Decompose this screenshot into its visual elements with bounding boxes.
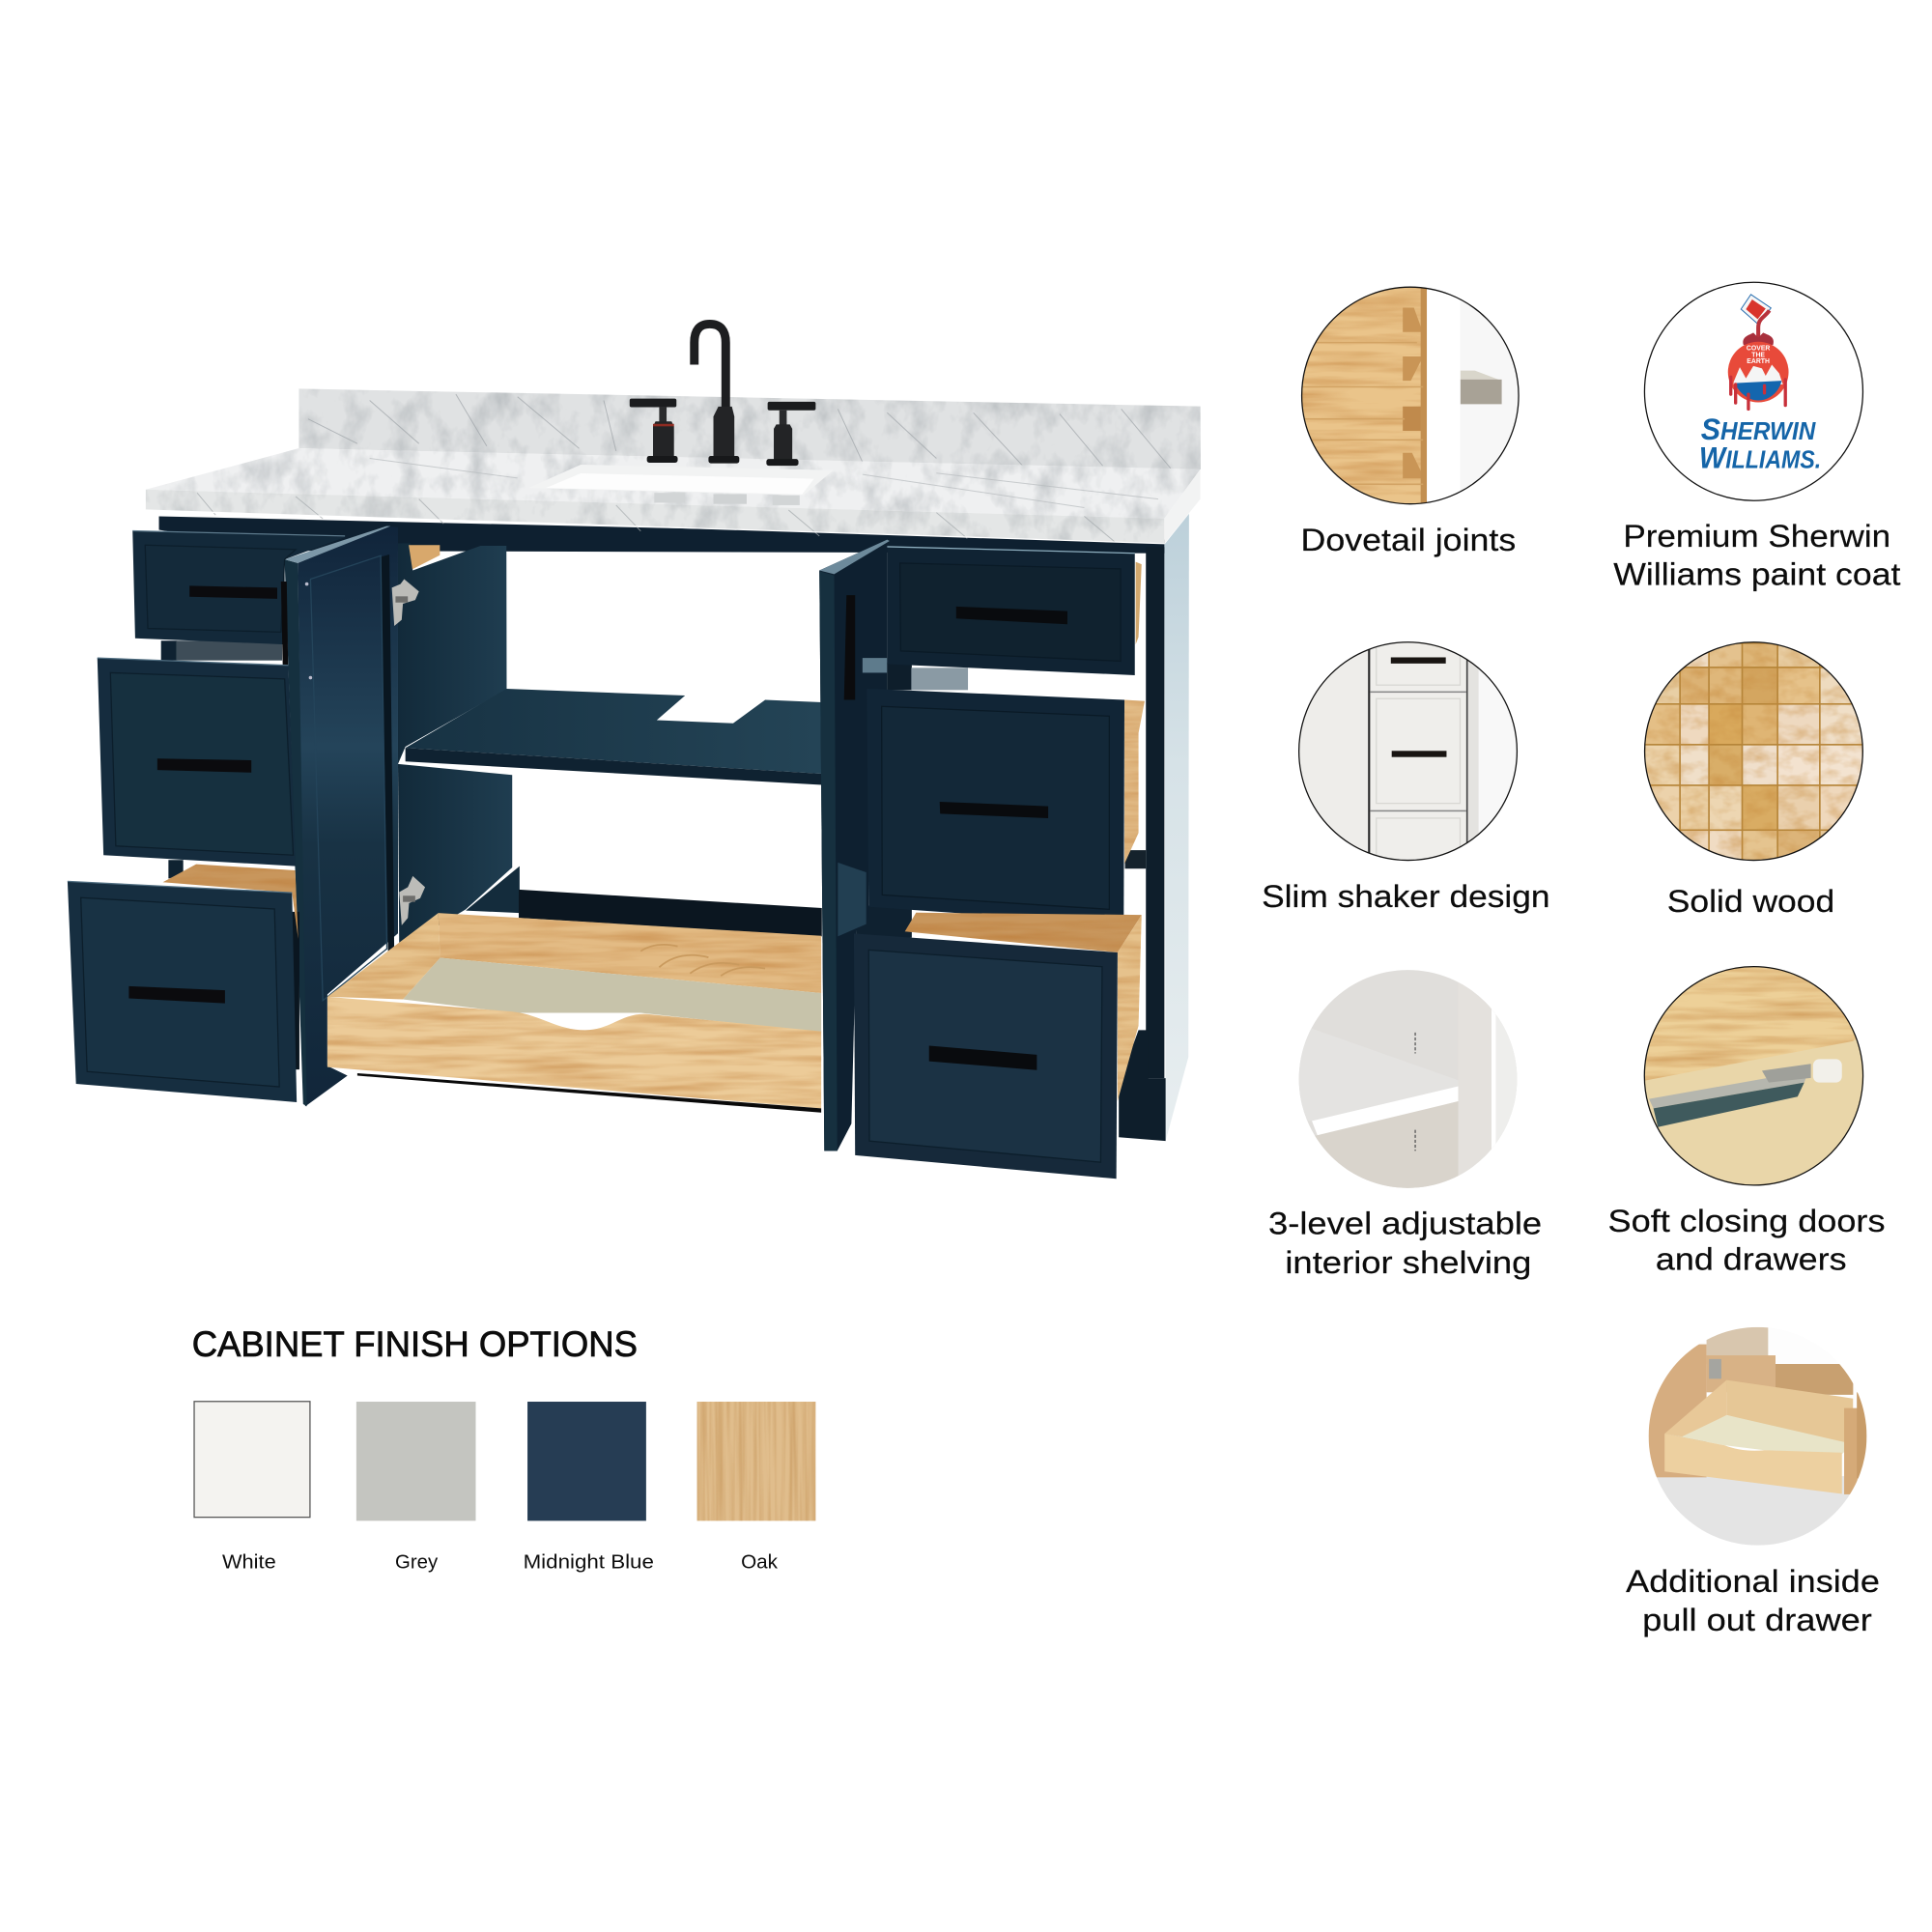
left interior panel upper <box>398 543 506 764</box>
left door <box>285 526 398 1106</box>
label: Premium Sherwin <box>1623 519 1890 554</box>
bottom left drawer interior <box>163 865 298 939</box>
label <box>1613 519 1900 591</box>
icon: sherwin williams logo <box>1644 282 1862 500</box>
lower back rail <box>466 867 822 936</box>
globe: COVER <box>1747 346 1770 353</box>
label: 3-level adjustable <box>1268 1206 1542 1240</box>
vanity product image <box>68 324 1201 1179</box>
right end panel <box>1164 514 1189 1141</box>
bottom right drawer <box>854 913 1142 1179</box>
left interior panel lower <box>398 764 512 949</box>
label <box>1608 1204 1886 1277</box>
swatch: white <box>194 1402 310 1573</box>
label: Additional inside <box>1626 1564 1880 1599</box>
hinge lower <box>399 876 425 925</box>
icon: solid wood blocks photo <box>1644 642 1863 862</box>
label: interior shelving <box>1285 1245 1531 1280</box>
label: pull out drawer <box>1642 1603 1872 1637</box>
swatch: white: White <box>222 1550 276 1573</box>
icon: drawer slide photo <box>1644 966 1863 1185</box>
icon: dovetail photo <box>1301 287 1520 505</box>
feature: soft closing <box>1608 966 1886 1277</box>
shelf <box>406 689 822 784</box>
hinge upper <box>392 579 419 626</box>
globe: THE <box>1751 352 1765 358</box>
pull-out wood drawer <box>327 913 821 1113</box>
icon: wood pull-out drawer photo <box>1649 1327 1868 1548</box>
right pipe reflection <box>887 663 968 690</box>
feature: pull out drawer <box>1626 1327 1880 1637</box>
top left drawer <box>132 530 345 679</box>
feature: slim shaker design <box>1262 635 1550 914</box>
icon: shelf photo <box>1298 970 1518 1189</box>
label: and drawers <box>1656 1242 1847 1277</box>
left faucet handle <box>630 399 678 463</box>
infographic canvas <box>68 282 1901 1637</box>
label <box>1268 1206 1542 1280</box>
feature: dovetail joints <box>1301 287 1520 557</box>
panel: cabinet finish options <box>192 1324 815 1573</box>
marble backsplash <box>298 388 1201 469</box>
swatch: grey: Grey <box>395 1550 439 1573</box>
faucet <box>695 324 739 464</box>
right faucet handle <box>766 402 815 466</box>
label: Dovetail joints <box>1301 523 1516 557</box>
sink <box>528 465 834 505</box>
label: Soft closing doors <box>1608 1204 1886 1238</box>
icon: shaker cabinet photo <box>1298 641 1519 862</box>
label: Williams paint coat <box>1613 556 1900 591</box>
icon: sherwin williams logo: WILLIAMS. <box>1699 440 1821 475</box>
top rail <box>159 516 1164 554</box>
globe <box>1728 342 1789 409</box>
swatch: oak <box>697 1402 815 1573</box>
middle left drawer <box>98 658 296 867</box>
feature: sherwin williams paint coat <box>1613 282 1900 591</box>
feature: adjustable shelving <box>1268 970 1542 1280</box>
poured paint <box>1758 310 1770 345</box>
globe: EARTH <box>1747 358 1770 365</box>
heading: CABINET FINISH OPTIONS <box>192 1324 638 1364</box>
label <box>1626 1564 1880 1637</box>
feature: solid wood <box>1644 642 1863 919</box>
middle right drawer <box>867 689 1145 924</box>
top right drawer <box>887 547 1142 675</box>
wood notch <box>409 545 440 569</box>
right door <box>819 540 912 1151</box>
left small posts <box>161 640 299 1069</box>
right stile and plinth <box>1119 547 1166 1141</box>
swatch: midnight blue <box>524 1402 654 1573</box>
bottom left drawer <box>68 881 297 1102</box>
label: Solid wood <box>1667 884 1834 919</box>
wordmark: SHERWIN <box>1701 412 1816 446</box>
paint splash <box>1743 332 1774 345</box>
paint can <box>1741 295 1771 325</box>
marble countertop surface <box>146 448 1201 519</box>
swatch: oak: Oak <box>741 1550 779 1573</box>
label: Slim shaker design <box>1262 879 1550 914</box>
swatch: grey <box>356 1402 475 1573</box>
swatch: midnight blue: Midnight Blue <box>524 1550 654 1573</box>
marble countertop edge <box>146 469 1201 544</box>
